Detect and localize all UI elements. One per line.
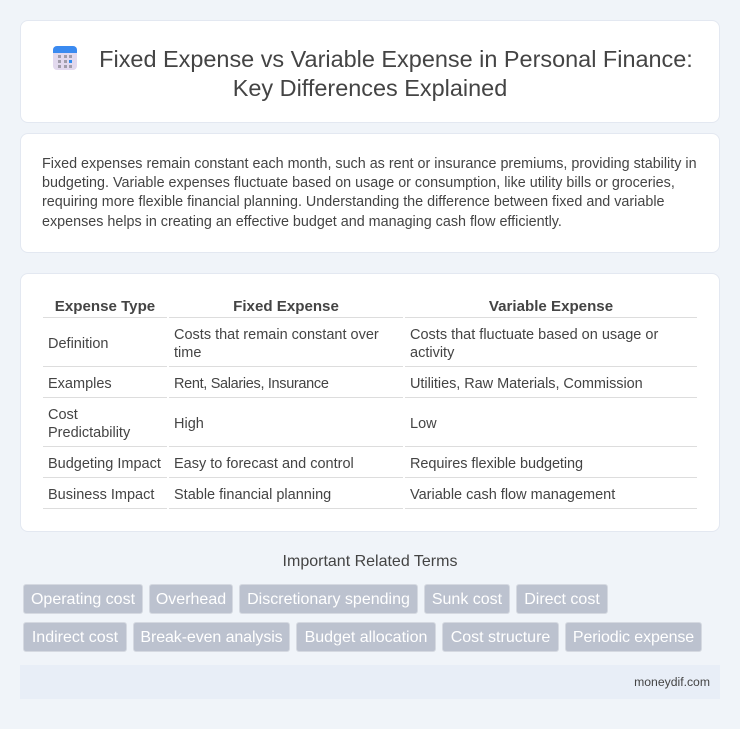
intro text bbox=[42, 156, 697, 230]
footer source: moneydif.com bbox=[634, 675, 710, 689]
related term tags: Discretionary spending bbox=[247, 591, 410, 608]
row: business impact: Variable cash flow management bbox=[410, 487, 615, 503]
row: definition: time bbox=[174, 345, 201, 361]
related terms heading: Important Related Terms bbox=[283, 553, 457, 570]
row: business impact bbox=[48, 487, 616, 503]
row: definition bbox=[48, 327, 658, 361]
title bbox=[99, 46, 693, 101]
row: definition: Costs that fluctuate based on usage or bbox=[410, 327, 658, 343]
row: budgeting impact: Budgeting Impact bbox=[48, 456, 161, 472]
row: examples: Rent, Salaries, Insurance bbox=[174, 376, 329, 392]
icon: calendar bbox=[53, 46, 77, 70]
row: business impact: Stable financial planning bbox=[174, 487, 331, 503]
related term tags: Break-even analysis bbox=[140, 629, 283, 646]
row: budgeting impact: Easy to forecast and control bbox=[174, 456, 354, 472]
related term tags bbox=[23, 584, 702, 652]
row: definition: Costs that remain constant over bbox=[174, 327, 379, 343]
related term tags: Sunk cost bbox=[432, 591, 502, 608]
row: business impact: Business Impact bbox=[48, 487, 154, 503]
row: cost predictability bbox=[48, 407, 437, 441]
row: budgeting impact bbox=[48, 456, 583, 472]
table card bbox=[20, 273, 720, 532]
related term tags: Operating cost bbox=[31, 591, 135, 608]
row: budgeting impact: Requires flexible budgeting bbox=[410, 456, 583, 472]
related term tags: Budget allocation bbox=[305, 629, 427, 646]
comparison table bbox=[43, 298, 697, 509]
intro text: Fixed expenses remain constant each month, such as rent or insurance premiums, providing stability in bbox=[42, 156, 697, 172]
header card bbox=[20, 20, 720, 123]
row: definition: activity bbox=[410, 345, 454, 361]
row: examples: Utilities, Raw Materials, Commission bbox=[410, 376, 643, 392]
row: cost predictability: High bbox=[174, 416, 204, 432]
row: cost predictability: Cost bbox=[48, 407, 78, 423]
row: cost predictability: Low bbox=[410, 416, 437, 432]
related term tags: Direct cost bbox=[524, 591, 600, 608]
intro card bbox=[20, 133, 720, 253]
row: definition: Definition bbox=[48, 336, 108, 352]
intro text: budgeting. Variable expenses fluctuate based on usage or consumption, like utility bills or groceries, bbox=[42, 175, 675, 191]
intro text: expenses helps in creating an effective budget and managing cash flow efficiently. bbox=[42, 214, 562, 230]
title: Key Differences Explained bbox=[233, 75, 507, 101]
header row: Variable Expense bbox=[489, 298, 613, 315]
related term tags: Indirect cost bbox=[32, 629, 118, 646]
header row: Expense Type bbox=[55, 298, 155, 315]
related term tags: Periodic expense bbox=[573, 629, 694, 646]
header row: Fixed Expense bbox=[233, 298, 339, 315]
title: Fixed Expense vs Variable Expense in Personal Finance: bbox=[99, 46, 693, 72]
footer bar bbox=[20, 665, 720, 699]
related term tags: Cost structure bbox=[451, 629, 550, 646]
header row bbox=[55, 298, 613, 315]
intro text: requiring more flexible financial planning. Understanding the difference between fixed and variable bbox=[42, 194, 664, 210]
related term tags: Overhead bbox=[156, 591, 226, 608]
row: examples: Examples bbox=[48, 376, 112, 392]
row: cost predictability: Predictability bbox=[48, 425, 130, 441]
row: examples bbox=[48, 376, 643, 392]
